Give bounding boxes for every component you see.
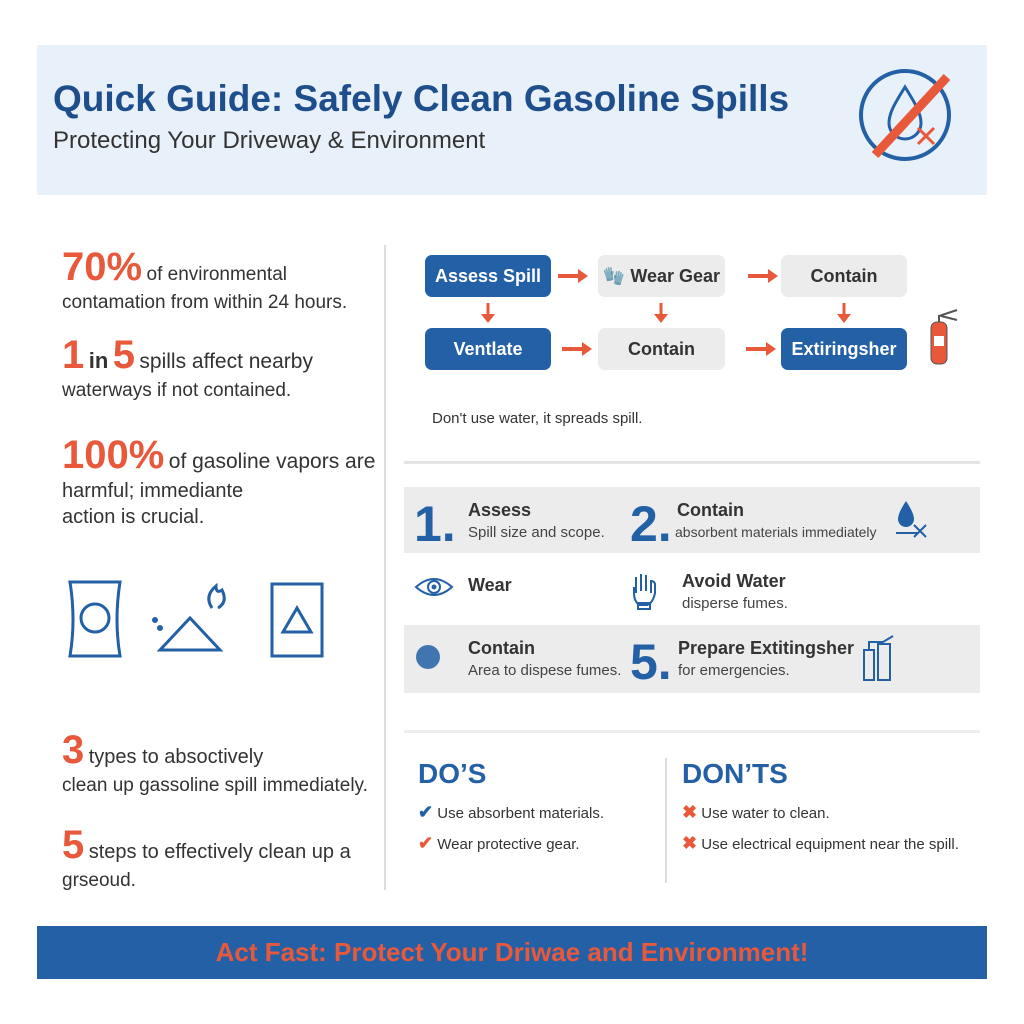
stat 1 in 5: waterways if not contained. — [62, 380, 291, 401]
flowchart: Contain — [628, 338, 695, 358]
stat 3 types — [62, 728, 368, 796]
icon: extinguisher — [930, 309, 958, 364]
steps grid: disperse fumes. — [682, 595, 788, 612]
stat 3 types: clean up gassoline spill immediately. — [62, 775, 368, 796]
do's: ✔ Wear protective gear. — [418, 833, 580, 853]
steps grid: Contain — [468, 638, 535, 658]
stat 3 types: 3 types to absoctively — [62, 728, 263, 772]
stat 5 steps — [62, 823, 351, 891]
stat 1 in 5: 1 in 5 spills affect nearby — [62, 333, 313, 377]
steps grid: Assess — [468, 500, 531, 520]
arrow down — [654, 303, 668, 323]
steps grid: 1. — [414, 496, 456, 552]
stat 100% — [62, 433, 375, 528]
footer banner — [37, 926, 987, 979]
arrow — [746, 342, 776, 356]
do's: DO’S — [418, 758, 486, 789]
steps grid: Avoid Water — [682, 571, 786, 591]
steps grid: Area to dispese fumes. — [468, 662, 621, 679]
stat 70% — [62, 245, 347, 313]
don'ts: ✖ Use electrical equipment near the spill. — [682, 833, 959, 853]
stat 100%: action is crucial. — [62, 506, 204, 528]
arrow — [558, 269, 588, 283]
steps grid: Contain — [677, 500, 744, 520]
steps grid: Spill size and scope. — [468, 524, 605, 541]
stat 70%: contamation from within 24 hours. — [62, 292, 347, 313]
flowchart: 🧤 Wear Gear — [603, 266, 720, 286]
note text: Don't use water, it spreads spill. — [432, 410, 642, 427]
steps grid: Prepare Extitingsher — [678, 638, 854, 658]
do's — [418, 758, 604, 853]
don'ts — [682, 758, 959, 853]
arrow — [748, 269, 778, 283]
flowchart: Extiringsher — [791, 338, 897, 358]
title: Quick Guide: Safely Clean Gasoline Spills — [53, 78, 789, 119]
don'ts: DON’TS — [682, 758, 788, 789]
stat 100%: harmful; immediante — [62, 480, 243, 502]
stat 1 in 5 — [62, 333, 313, 401]
stat 100%: 100% of gasoline vapors are — [62, 433, 375, 477]
flowchart — [425, 255, 958, 370]
steps grid: absorbent materials immediately — [675, 524, 877, 540]
don'ts: ✖ Use water to clean. — [682, 802, 830, 822]
steps grid — [404, 487, 980, 693]
steps grid: 5. — [630, 634, 672, 690]
do's: ✔ Use absorbent materials. — [418, 802, 604, 822]
stat 70%: 70% of environmental — [62, 245, 287, 289]
icons: absorbent materials — [68, 580, 324, 658]
flowchart: Contain — [810, 266, 878, 286]
icon: no gasoline — [859, 69, 951, 161]
left stats column — [62, 245, 375, 891]
flowchart: Assess Spill — [435, 266, 541, 286]
arrow down — [481, 303, 495, 323]
arrow — [562, 342, 592, 356]
steps grid: 2. — [630, 496, 672, 552]
flowchart: Ventlate — [453, 338, 523, 358]
stat 5 steps: grseoud. — [62, 870, 136, 891]
arrow down — [837, 303, 851, 323]
steps grid: for emergencies. — [678, 662, 790, 679]
header band — [37, 45, 987, 195]
subtitle: Protecting Your Driveway & Environment — [53, 127, 485, 154]
stat 5 steps: 5 steps to effectively clean up a — [62, 823, 351, 867]
footer banner: Act Fast: Protect Your Driwae and Environment! — [216, 937, 808, 967]
steps grid: Wear — [468, 575, 512, 595]
